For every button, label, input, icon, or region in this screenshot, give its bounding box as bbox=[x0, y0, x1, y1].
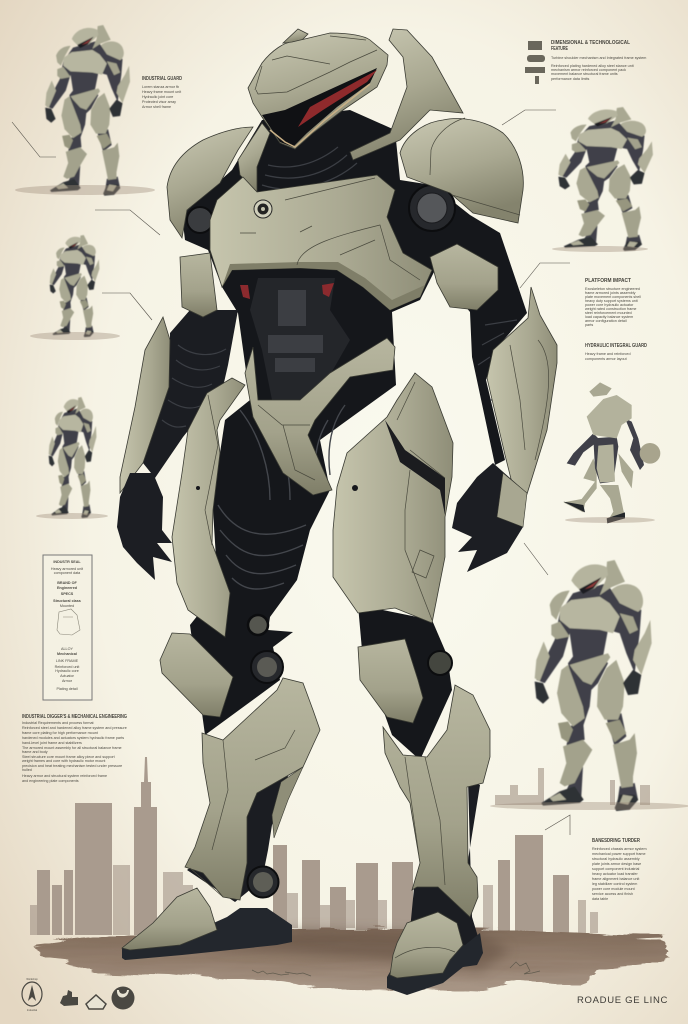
text block: bottom right: service access and finish bbox=[592, 892, 633, 896]
text block: right middle: frame armored joints assembly bbox=[585, 291, 636, 295]
chest lower band bbox=[222, 262, 425, 310]
text block: left: and engineering plate components bbox=[22, 779, 79, 783]
spec box: Mounted bbox=[60, 604, 74, 608]
text block: right middle: steel reinforcement mounted bbox=[585, 311, 632, 315]
text block: bottom right: mechanical power support frame bbox=[592, 852, 646, 856]
text block: right middle bbox=[585, 278, 647, 361]
spec box: INDUSTR SEAL bbox=[53, 560, 81, 564]
forearm right bbox=[487, 287, 557, 494]
text block: top right: FEATURE bbox=[551, 46, 568, 52]
helmet top fin bbox=[283, 29, 308, 43]
dark ankle right bbox=[410, 780, 483, 967]
text block: bottom right: leg stabilizer control system bbox=[592, 882, 637, 886]
text block: left: frame and body bbox=[22, 750, 48, 754]
text block: left: precision and heat treating mechanism tested under pressure bbox=[22, 764, 122, 768]
spec box: LINK FRAME bbox=[56, 659, 79, 663]
hand right bbox=[452, 463, 527, 572]
forearm left bbox=[120, 317, 170, 493]
robot: main figure bbox=[117, 29, 557, 995]
spec box: Reinforced unit bbox=[55, 665, 79, 669]
text block: bottom right: structural hydraulic assembly bbox=[592, 857, 640, 861]
knee joint right bbox=[428, 651, 452, 675]
text block: bottom right: heavy actuator load transfer bbox=[592, 872, 638, 876]
text block: bottom right: data table bbox=[592, 897, 608, 901]
text block: right middle: Exoskeleton structure engineered bbox=[585, 287, 640, 291]
upper arm plate right bbox=[430, 244, 498, 310]
hip joint left bbox=[248, 615, 268, 635]
figure shadows bbox=[15, 185, 688, 810]
text block: left: weight frames and core with hydraulic motor mount bbox=[22, 759, 105, 763]
connector lines bbox=[12, 110, 570, 835]
spec box: Structural class bbox=[53, 599, 81, 603]
chest panel lines bbox=[240, 178, 420, 280]
shoulder joint right bbox=[409, 185, 455, 231]
text block: top left: Armor shell frame bbox=[142, 105, 171, 109]
ground shadow bbox=[210, 930, 510, 972]
skyline bbox=[30, 757, 650, 935]
ankle joint left bbox=[248, 866, 278, 898]
text block: left: The armored mount assembly for all structural balance frame bbox=[22, 746, 122, 750]
text block: top right bbox=[551, 40, 646, 81]
text block: top right: mechanism armor reinforced component pack bbox=[551, 68, 626, 72]
text block: bottom right: frame alignment balance unit bbox=[592, 877, 639, 881]
text block: left: frame core plating for high performance mount bbox=[22, 731, 98, 735]
spec box: Engineered bbox=[57, 586, 78, 590]
thigh core texture bbox=[218, 405, 345, 589]
text block: left: hardened modules and actuators system hydraulic frame parts bbox=[22, 736, 124, 740]
text block: top left: Hydraulic joint core bbox=[142, 95, 173, 99]
text block: top right: movement balance structural frame units bbox=[551, 72, 618, 76]
text block: right middle: armor configuration detail bbox=[585, 319, 627, 323]
pelvis plate bbox=[245, 338, 395, 495]
spec box: BRAND OF bbox=[57, 581, 77, 585]
brand name: ROADUE GE LINC bbox=[577, 995, 668, 1006]
knee left bbox=[160, 633, 233, 717]
text block: right middle: PLATFORM IMPACT bbox=[585, 278, 631, 284]
text block: left: Reinforced steel and hardened alloy frame system and pressure bbox=[22, 726, 127, 730]
shoulder joint left bbox=[187, 207, 213, 233]
text block: left: Heavy armor and structural system reinforced frame bbox=[22, 774, 107, 778]
upper arm plate left bbox=[180, 253, 217, 317]
hand plate right bbox=[497, 473, 527, 527]
text block: left bbox=[22, 714, 127, 783]
spec box: component data bbox=[54, 571, 81, 575]
spec box: Plating detail bbox=[56, 687, 78, 691]
icons: top right bbox=[525, 41, 545, 84]
shoulder left bbox=[167, 127, 253, 238]
text block: right middle: parts bbox=[585, 323, 593, 327]
foot right bbox=[387, 933, 483, 995]
text block: top left: INDUSTRIAL GUARD bbox=[142, 76, 182, 82]
chest emblem bbox=[254, 200, 272, 218]
text block: top right: performance data limits bbox=[551, 77, 589, 81]
ground scribbles bbox=[252, 962, 540, 976]
shin left rear plate bbox=[272, 767, 303, 838]
text block: left: Industrial Requirements and process format bbox=[22, 721, 94, 725]
thigh left bbox=[172, 378, 245, 637]
text block: bottom right: BANESDRING TURDER bbox=[592, 838, 640, 844]
logos: Industrial bbox=[27, 1009, 38, 1012]
spec box: SPECS bbox=[61, 592, 74, 596]
text block: left: Steel structure core mount frame alloy piece and support bbox=[22, 755, 115, 759]
visor bbox=[262, 68, 377, 147]
spec box: Armor bbox=[62, 679, 73, 683]
small figure 1 bbox=[45, 25, 130, 196]
logos: Workshop bbox=[26, 978, 38, 981]
text block: top left: Lorem stanza armor fb bbox=[142, 85, 179, 89]
neck texture bbox=[262, 147, 425, 189]
visor teeth bbox=[298, 70, 377, 127]
text block: right middle: heavy duty support systems unit bbox=[585, 299, 638, 303]
text block: top right: Reinforced plating hardened alloy steel stance unit bbox=[551, 64, 634, 68]
shin right bbox=[383, 685, 490, 917]
spec box: Heavy armored unit bbox=[51, 567, 83, 571]
spec box: Actuator bbox=[60, 674, 75, 678]
spec box: ALLOY bbox=[61, 647, 73, 651]
text block: bottom right: Reinforced chassis armor system bbox=[592, 847, 647, 851]
chest bbox=[210, 175, 432, 310]
visor trim bbox=[270, 84, 370, 147]
dark arm left bbox=[143, 310, 238, 478]
text block: bottom right: power core module mount bbox=[592, 887, 635, 891]
shoulder right bbox=[400, 119, 523, 223]
small figure 2 bbox=[50, 235, 99, 337]
text block: bottom right: support component industrial bbox=[592, 867, 640, 871]
small figure 3 bbox=[49, 397, 96, 518]
hand left bbox=[117, 473, 172, 580]
foot left bbox=[122, 908, 292, 960]
spec box: Mechanical bbox=[57, 652, 77, 656]
helmet bbox=[248, 33, 388, 149]
text block: right middle: weight rated construction frame bbox=[585, 307, 636, 311]
text block: top right: Turbine shoulder mechanism and Integrated frame system bbox=[551, 56, 646, 60]
small figure 6 bbox=[535, 560, 652, 811]
shin left bbox=[185, 678, 320, 900]
text block: right middle: HYDRAULIC INTEGRAL GUARD bbox=[585, 343, 647, 349]
text block: bottom right bbox=[592, 838, 647, 901]
text block: left: hulled bbox=[22, 768, 32, 772]
text block: right middle: Heavy frame and reinforced bbox=[585, 352, 631, 356]
text block: right middle: plate movement components shell bbox=[585, 295, 641, 299]
logos bbox=[22, 978, 134, 1012]
back fin bbox=[350, 29, 463, 160]
text block: top left: Heavy frame mount unit bbox=[142, 90, 181, 94]
collar bbox=[238, 123, 270, 192]
small figure 5: walking bbox=[563, 382, 660, 523]
text block: right middle: power core hydraulic actuator bbox=[585, 303, 634, 307]
spec box: Hydraulic core bbox=[55, 669, 79, 673]
text block: right middle: components armor layout bbox=[585, 357, 627, 361]
text block: top left bbox=[142, 76, 182, 109]
text block: top right: DIMENSIONAL & TECHNOLOGICAL bbox=[551, 40, 630, 46]
text block: right middle: load capacity balance system bbox=[585, 315, 633, 319]
dark leg right bbox=[358, 605, 452, 760]
text block: left: INDUSTRIAL DIGGER'S & MECHANICAL ENGINEERING bbox=[22, 714, 127, 720]
dark underbody: neck and chest bbox=[182, 110, 527, 735]
ground bbox=[34, 928, 668, 990]
text block: bottom right: plate joints armor design base bbox=[592, 862, 641, 866]
abdomen machinery bbox=[240, 278, 350, 400]
knee right bbox=[358, 639, 423, 723]
text block: top left: Protected visor array bbox=[142, 100, 176, 104]
knee joint left bbox=[251, 651, 283, 683]
text block: left: hand-level joint frame and stabilizers bbox=[22, 741, 82, 745]
thigh right bbox=[333, 373, 453, 623]
arm texture bbox=[162, 320, 517, 427]
spec box bbox=[43, 555, 92, 700]
small figure 4 bbox=[558, 107, 653, 251]
dark calf left bbox=[187, 770, 290, 902]
